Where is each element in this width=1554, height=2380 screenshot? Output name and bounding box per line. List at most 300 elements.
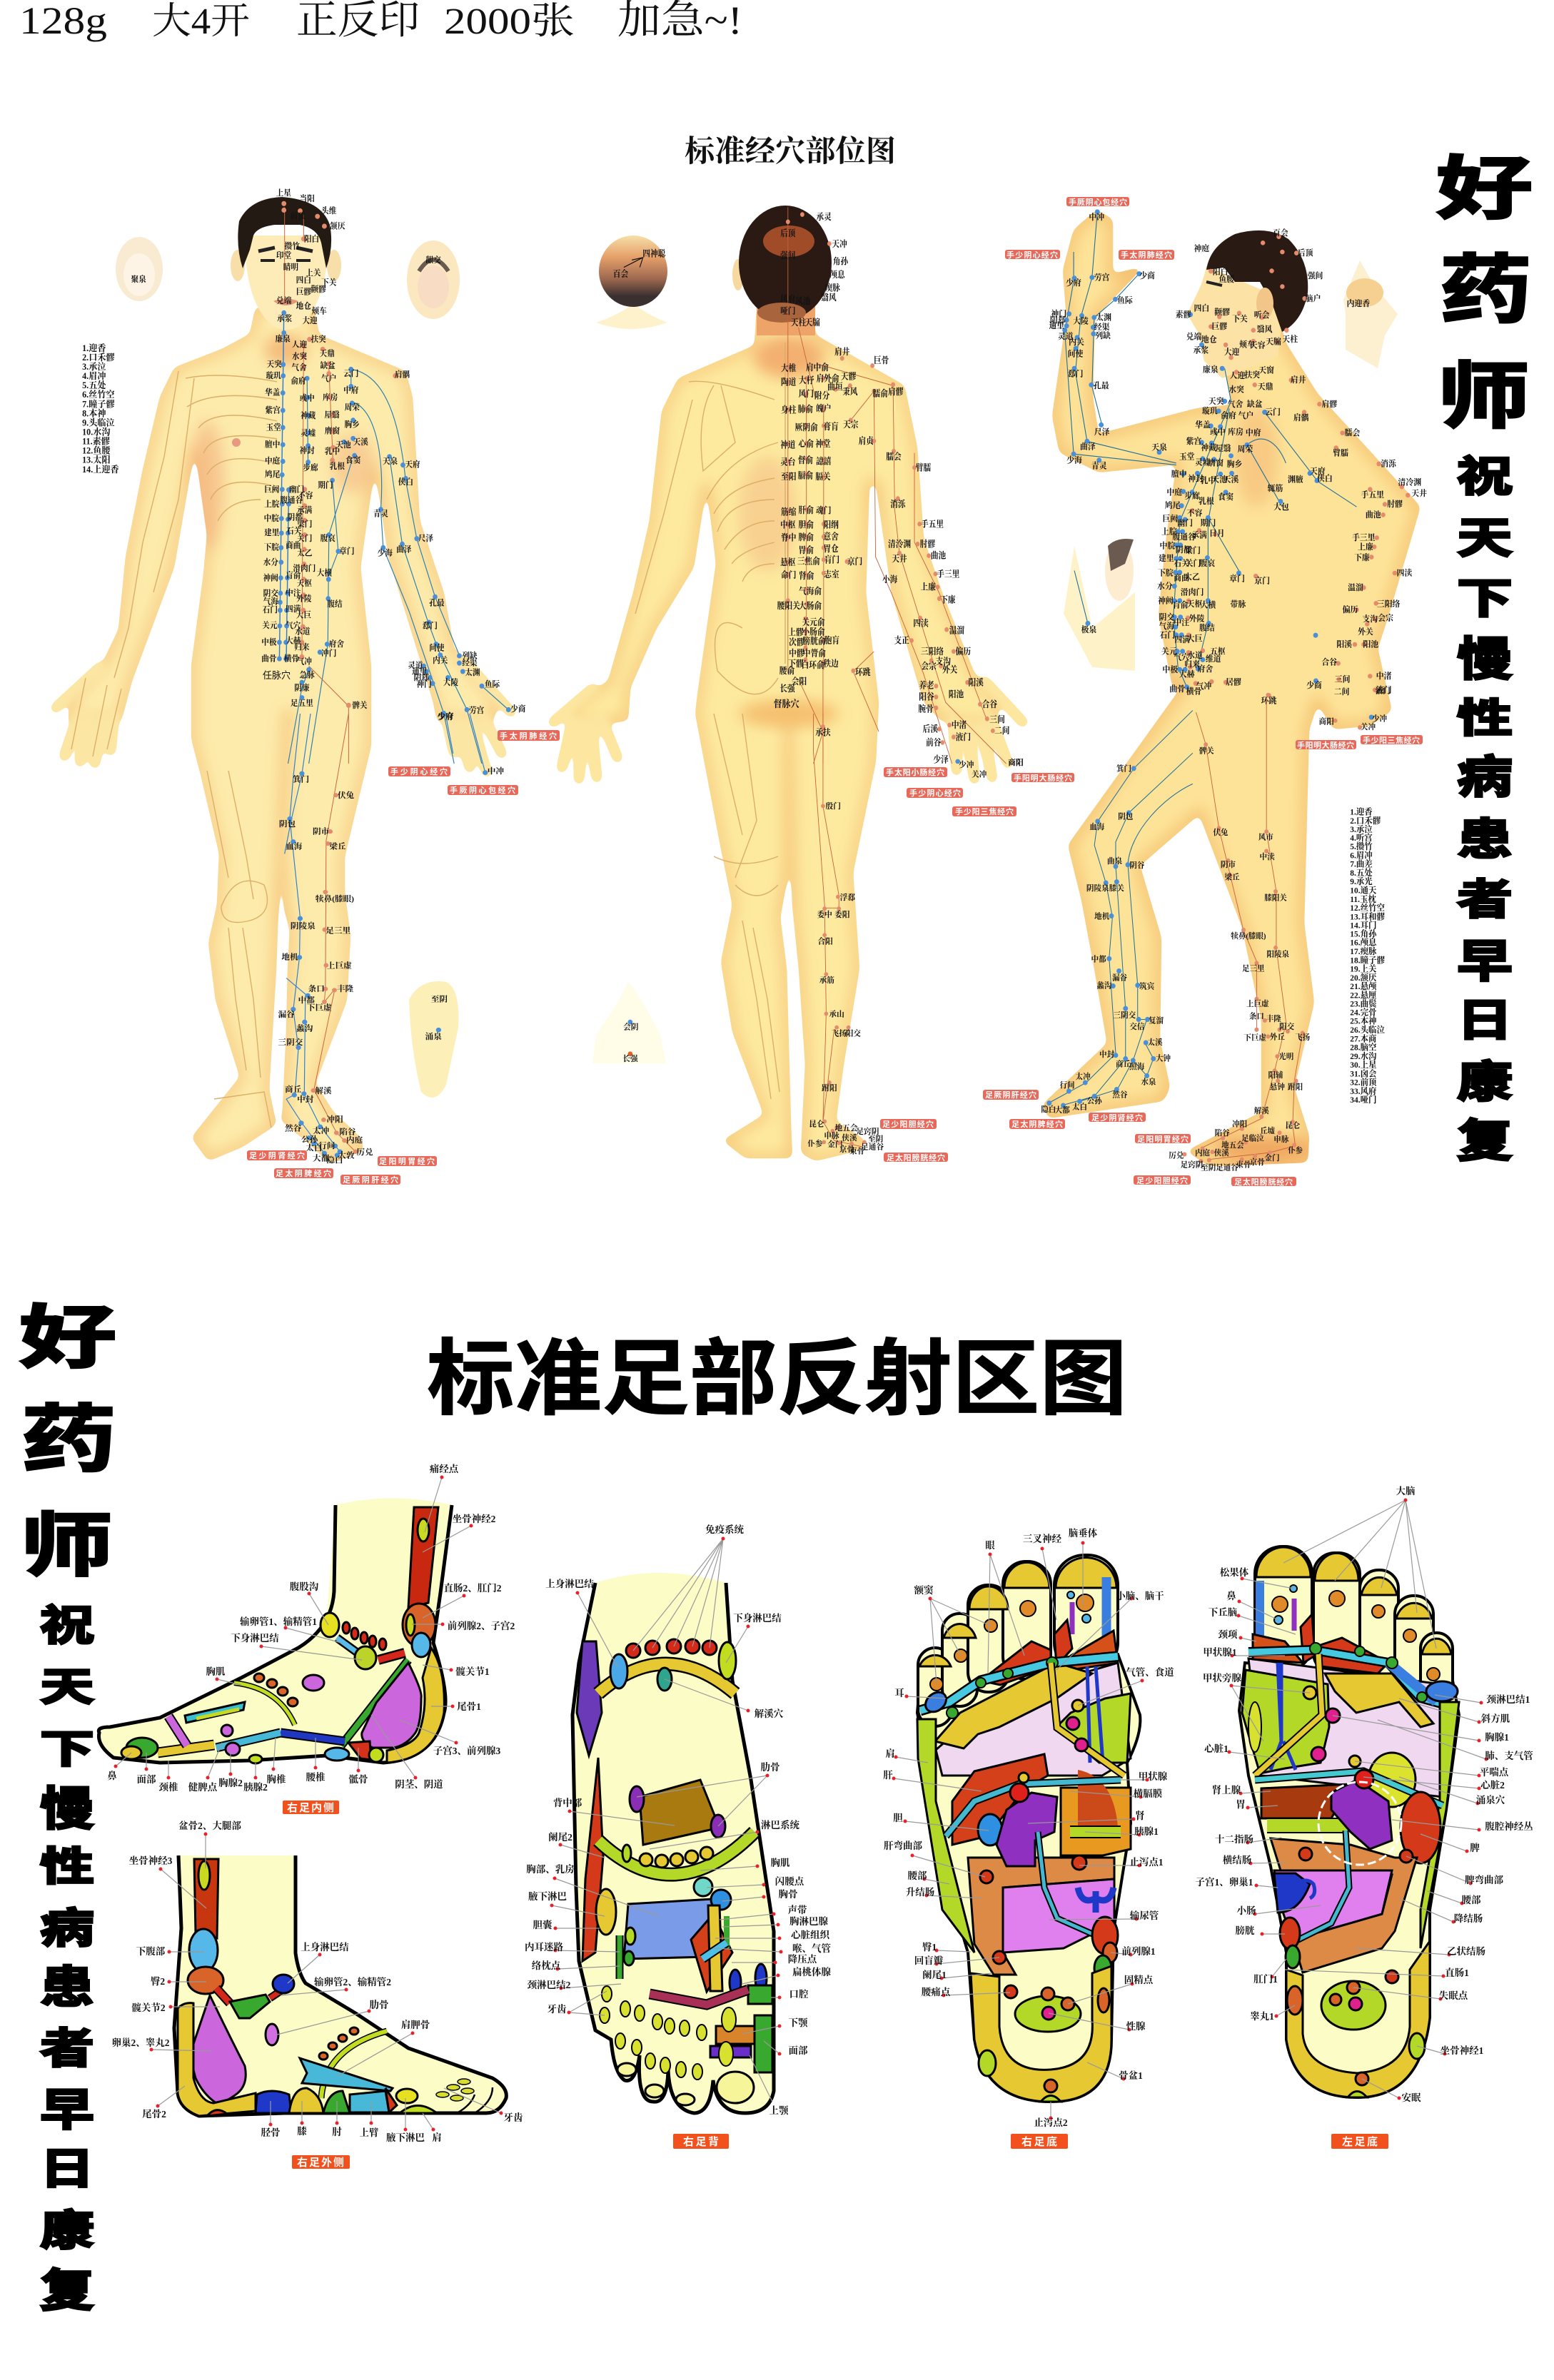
meridians and points back upper: 百会 xyxy=(613,268,629,279)
panel: right foot medial side xyxy=(99,1463,515,1814)
panel: right foot dorsal: 降压点 xyxy=(788,1953,818,1965)
meridians and points back upper: 阳纲 xyxy=(823,520,839,530)
meridians and points front upper: 承浆 xyxy=(277,313,292,323)
panel: right foot sole: 臀1 xyxy=(922,1941,937,1953)
panel: right foot sole: 阑尾1 xyxy=(922,1969,947,1980)
meridians and points back lower: 仆参 xyxy=(807,1139,823,1148)
meridians and points side upper: 周荣 xyxy=(1237,444,1253,454)
meridians and points side lower: 足临泣 xyxy=(1241,1133,1264,1143)
panel: right foot dorsal: 背中部 xyxy=(553,1797,582,1808)
meridians and points side lower: 外丘 xyxy=(1270,1032,1285,1041)
meridians and points side lower: 商阳 xyxy=(1319,716,1334,726)
meridians and points back upper: 四渎 xyxy=(913,618,929,629)
panel: right foot dorsal: 牙齿 xyxy=(547,2003,567,2015)
panel: left foot sole: 心脏1 xyxy=(1204,1743,1228,1754)
meridians and points front lower: 商丘 xyxy=(285,1084,301,1094)
meridian tags front: 足厥阴肝经穴 xyxy=(343,1175,398,1185)
meridians and points front lower: 足三里 xyxy=(326,926,350,935)
meridians and points front upper: 四白 xyxy=(296,275,311,285)
meridians and points back upper: 后溪 xyxy=(923,724,939,734)
meridians and points side upper: 内迎香 xyxy=(1347,298,1370,308)
meridians and points front lower: 公孙 xyxy=(301,1134,318,1144)
meridians and points back lower: 足通谷 xyxy=(861,1143,884,1152)
meridians and points front lower: 少府 xyxy=(437,712,454,721)
meridians and points side lower: 隐白 xyxy=(1041,1105,1056,1114)
panel: right foot dorsal: 声带 xyxy=(788,1904,807,1915)
ribs and bones back xyxy=(635,343,785,1099)
meridians and points side lower: 蠡沟 xyxy=(1096,981,1112,991)
meridians and points side lower: 19.上关 xyxy=(1350,963,1377,974)
panel: right foot dorsal: 阑尾2 xyxy=(548,1831,572,1843)
meridians and points front upper: 上星 xyxy=(276,188,291,198)
meridians and points back upper: 二间 xyxy=(994,725,1010,736)
meridians and points back upper: 膈关 xyxy=(815,471,831,482)
panel: left foot sole: 子宫1、卵巢1 xyxy=(1195,1876,1253,1888)
panel: left foot sole: 腰部 xyxy=(1462,1894,1481,1905)
meridians and points side upper: 彧中 xyxy=(1210,427,1226,437)
tag: right foot dorsal: 右足背 xyxy=(683,2135,719,2148)
meridians and points side upper: 郄门 xyxy=(1068,368,1083,379)
meridians and points side upper: 缺盆 xyxy=(1247,399,1263,409)
panel: left foot sole: 小肠 xyxy=(1236,1905,1256,1916)
panel: right foot lateral side: 胫骨 xyxy=(261,2127,281,2138)
meridians and points side upper: 列缺 xyxy=(1095,330,1111,340)
panel: right foot lateral side: 牙齿 xyxy=(504,2112,523,2123)
meridians and points side lower: 28.脑空 xyxy=(1350,1042,1377,1053)
meridians and points side upper: 扶突 xyxy=(1244,370,1260,380)
meridians and points back upper: 督俞 xyxy=(798,455,814,465)
meridians and points side upper: 肘髎 xyxy=(1387,499,1403,509)
panel: right foot sole: 性腺 xyxy=(1126,2020,1146,2032)
meridians and points front upper: 上脘 xyxy=(264,499,279,509)
meridians and points side lower: 照海 xyxy=(1129,1062,1145,1071)
panel: right foot sole: 三叉神经 xyxy=(1023,1533,1061,1544)
panel: right foot sole: 脑垂体 xyxy=(1069,1527,1098,1539)
meridians and points side upper: 四满 xyxy=(1174,634,1190,644)
meridians and points side lower: 太冲 xyxy=(1076,1072,1091,1081)
meridians and points side lower: 三阴交 xyxy=(1114,1011,1136,1020)
meridians and points front lower: 梁丘 xyxy=(329,841,345,851)
panel: left foot sole: 横结肠 xyxy=(1223,1854,1252,1865)
meridians and points side upper: 神藏 xyxy=(1201,442,1216,452)
meridians and points back upper: 长强 xyxy=(779,683,796,694)
meridians and points back upper: 胞肓 xyxy=(824,635,840,646)
meridians and points front upper: 天突 xyxy=(266,360,282,369)
panel: right foot dorsal: 颈淋巴结2 xyxy=(528,1979,571,1990)
panel: right foot medial side: 胸肌 xyxy=(206,1666,226,1677)
meridians and points side upper: 腹通谷 xyxy=(1172,532,1196,542)
meridians and points back lower: 阳交 xyxy=(846,1028,861,1038)
meridians and points front lower: 厉兑 xyxy=(357,1147,373,1157)
meridians and points side lower: 至阴足通谷 xyxy=(1201,1163,1238,1173)
meridians and points side upper: 劳宫 xyxy=(1094,272,1110,282)
meridians and points back upper: 强间 xyxy=(780,250,796,260)
meridians and points back upper: 陶道 xyxy=(781,377,797,388)
panel: right foot lateral side: 肘 xyxy=(332,2126,342,2137)
slogan: left column: 天 xyxy=(40,1665,94,1709)
meridians and points front upper: 紫宫 xyxy=(266,405,281,415)
panel: left foot sole: 甲状旁腺 xyxy=(1203,1672,1241,1683)
meridians and points side lower: 阴市 xyxy=(1221,860,1236,869)
meridians and points back lower: 浮郄 xyxy=(840,893,855,902)
meridians and points side upper: 神门 xyxy=(1051,308,1066,318)
meridians and points back upper: 肩贞 xyxy=(858,435,874,446)
figure: back body xyxy=(553,206,1074,1163)
meridians and points side upper: 颧髎 xyxy=(1214,307,1230,317)
meridians and points back upper: 小海 xyxy=(882,574,898,584)
meridians and points side lower: 交信 xyxy=(1129,1022,1145,1031)
meridians and points back upper: 臑会 xyxy=(886,451,902,462)
meridians and points back upper: 手三里 xyxy=(937,569,960,579)
panel: right foot medial side: 输卵管1、输精管1 xyxy=(240,1616,317,1627)
meridians and points side lower: 箕门 xyxy=(1116,764,1131,774)
panel: right foot sole: 小脑、脑干 xyxy=(1116,1591,1164,1601)
panel: left foot sole: 脾 xyxy=(1470,1842,1480,1853)
slogan: right column: 师 xyxy=(1438,356,1530,437)
meridians and points side upper: 幽门 xyxy=(1177,518,1193,528)
meridians and points front lower xyxy=(278,712,504,1165)
meridians and points front upper: 印堂 xyxy=(276,250,291,260)
meridians and points side upper: 手五里 xyxy=(1361,490,1384,500)
panel: right foot dorsal: 胆囊 xyxy=(533,1919,553,1930)
panel: right foot medial side: 健脾点 xyxy=(188,1781,218,1793)
meridians and points side lower: 27.本商 xyxy=(1350,1033,1377,1044)
meridians and points back upper: 巨骨 xyxy=(874,355,889,365)
meridians and points side upper: 气户 xyxy=(1238,410,1253,420)
meridians and points side upper: 脑户 xyxy=(1306,293,1321,303)
meridians and points side lower: 冲阳 xyxy=(1232,1119,1247,1128)
meridians and points side lower: 下巨虚 xyxy=(1243,1033,1266,1043)
meridians and points back upper: 下廉 xyxy=(940,594,956,605)
meridians and points back upper: 腕骨 xyxy=(918,704,934,714)
panel: right foot medial side: 面部 xyxy=(137,1773,156,1785)
panel: right foot dorsal: 胸部、乳房 xyxy=(526,1863,575,1875)
meridians and points side lower: 膝关 xyxy=(1109,883,1124,893)
meridians and points front upper: 攒竹 xyxy=(285,240,300,251)
panel: left foot sole: 鼻 xyxy=(1226,1590,1236,1601)
meridians and points back upper: 臑俞 xyxy=(873,388,888,399)
panel: left foot sole: 下丘脑 xyxy=(1209,1607,1238,1618)
meridians and points front upper: 2.口禾髎 xyxy=(82,352,115,363)
panel: right foot sole: 输尿管 xyxy=(1130,1910,1159,1921)
meridians and points side lower: 昆仑 xyxy=(1285,1120,1301,1130)
meridians and points front lower: 涌泉 xyxy=(425,1031,442,1041)
panel: right foot sole: 骨盆1 xyxy=(1119,2070,1143,2081)
meridians and points side lower: 少冲 xyxy=(1372,714,1387,723)
panel: left foot sole: 大脑 xyxy=(1396,1485,1416,1497)
meridians and points side lower: 17.瘈脉 xyxy=(1350,946,1377,956)
meridians and points side upper: 百会 xyxy=(1273,228,1288,238)
meridians and points side upper: 中冲 xyxy=(1089,212,1104,222)
meridians and points side upper: 外关 xyxy=(1358,627,1373,637)
meridians and points side upper: 四白 xyxy=(1194,303,1209,313)
meridians and points side upper: 居髎 xyxy=(1226,677,1241,687)
meridians and points front upper: 扶突 xyxy=(311,334,326,344)
meridians and points side upper: 阴郄 xyxy=(1050,315,1066,325)
meridians and points front upper: 神藏 xyxy=(301,410,316,420)
meridians and points front upper: 3.承泣 xyxy=(82,361,106,372)
panel: right foot dorsal: 内耳迷路 xyxy=(525,1941,563,1953)
meridians and points front upper: 大赫 xyxy=(286,635,301,646)
meridians and points side lower: 34.哑门 xyxy=(1350,1095,1377,1105)
meridians and points side upper: 曲骨 xyxy=(1169,684,1185,694)
callouts dorsal xyxy=(552,1539,781,2102)
meridians and points back upper: 胆俞 xyxy=(799,520,814,530)
meridians and points side lower: 13.耳和髎 xyxy=(1350,911,1385,921)
meridians and points side upper: 听会 xyxy=(1254,310,1270,320)
meridians and points side upper: 玉堂 xyxy=(1179,451,1195,461)
title: foot reflexology chart: 标准足部反射区图 xyxy=(427,1332,1127,1425)
meridians and points front upper: 石门 xyxy=(263,604,278,614)
meridian tags side: 足太阳膀胱经穴 xyxy=(1234,1177,1293,1187)
meridians and points side upper: 商曲 xyxy=(1174,572,1189,582)
slogan: right column: 好 xyxy=(1436,150,1533,228)
meridians and points back upper: 消泺 xyxy=(890,499,907,509)
meridians and points side upper: 渊腋 xyxy=(1288,474,1303,485)
meridians and points side upper: 中极 xyxy=(1162,664,1178,674)
small anatomy insets: tongue, mouth, sole, perineum, nose, raised arm xyxy=(116,237,1398,1098)
meridians and points side upper: 维道 xyxy=(1206,654,1221,664)
panel: right foot dorsal: 胸骨 xyxy=(778,1888,798,1900)
slogan: right column: 慢 xyxy=(1457,633,1513,685)
meridians and points front upper: 少府 xyxy=(438,712,453,721)
meridians and points front upper: 少海 xyxy=(378,547,393,558)
meridians and points front upper: 龈交 xyxy=(425,255,441,265)
meridians and points back upper: 支沟 xyxy=(936,657,951,667)
meridians and points side upper: 鸠尾 xyxy=(1165,500,1181,510)
meridians and points back upper: 督脉穴 xyxy=(774,698,799,709)
meridians and points side lower: 大都 xyxy=(1055,1105,1070,1115)
figure: side body xyxy=(983,197,1427,1187)
slogan: right column: 者 xyxy=(1457,876,1513,923)
meridians and points back upper: 肩髎 xyxy=(888,386,904,397)
meridians and points front lower: 血海 xyxy=(286,841,302,851)
meridians and points front lower: 陷谷 xyxy=(339,1127,356,1137)
meridians and points side upper: 步廊 xyxy=(1184,490,1200,501)
meridians and points front upper: 肓俞 xyxy=(286,570,301,580)
meridians and points front upper: 四满 xyxy=(286,604,301,614)
meridian tags side: 足少阳胆经穴 xyxy=(1136,1175,1188,1185)
meridians and points side upper: 大赫 xyxy=(1179,669,1195,679)
panel: right foot medial side: 痛经点 xyxy=(430,1463,460,1474)
meridians and points back upper: 中枢 xyxy=(780,520,796,530)
meridians and points side upper: 环跳 xyxy=(1261,696,1277,706)
meridians and points side upper: 腹结 xyxy=(1199,623,1215,633)
meridians and points front upper: 下关 xyxy=(321,277,336,288)
meridians and points side upper: 巨阙 xyxy=(1162,513,1178,524)
panel: right foot sole: 前列腺1 xyxy=(1121,1945,1156,1957)
meridians and points back upper: 脾俞 xyxy=(799,532,814,542)
panel: right foot sole: 胆 xyxy=(893,1813,903,1823)
slogan: right column: 患 xyxy=(1457,815,1513,864)
meridians and points side upper: 少商 xyxy=(1306,680,1322,690)
meridians and points side upper: 鱼腰 xyxy=(1219,274,1235,284)
panel: right foot medial side: 坐骨神经2 xyxy=(453,1513,496,1524)
meridians and points front upper: 10.水沟 xyxy=(82,426,111,437)
panel: right foot dorsal: 扁桃体腺 xyxy=(792,1966,831,1978)
meridians and points side upper: 消泺 xyxy=(1381,458,1397,469)
meridians and points side upper: 期门 xyxy=(1200,518,1216,528)
meridian tags front: 足阳明胃经穴 xyxy=(379,1156,435,1166)
meridians and points front lower: 中都 xyxy=(298,995,315,1005)
meridians and points side lower: 1.迎香 xyxy=(1350,806,1373,816)
meridians and points side upper: 璇玑 xyxy=(1202,405,1218,416)
meridians and points front upper: 天池 xyxy=(335,440,351,450)
meridians and points back upper: 环跳 xyxy=(855,667,871,677)
meridians and points front upper: 缺盆 xyxy=(321,360,335,370)
meridians and points side lower: 25.本神 xyxy=(1350,1016,1377,1026)
meridians and points back upper: 灵台 xyxy=(780,457,796,467)
meridians and points back lower: 会阴 xyxy=(623,1022,639,1031)
meridians and points front lower: 阴陵泉 xyxy=(291,921,316,931)
meridians and points front upper: 不容 xyxy=(298,490,313,500)
slogan: right column: 药 xyxy=(1440,249,1532,333)
meridian tags back: 手少阳三焦经穴 xyxy=(955,806,1014,816)
panel: right foot sole: 肝 xyxy=(883,1769,893,1781)
panel: left foot sole: 腹腔神经丛 xyxy=(1485,1821,1533,1832)
meridians and points back upper: 京门 xyxy=(847,556,862,567)
slogan: right column: 康 xyxy=(1457,1058,1513,1106)
meridians and points back upper: 下髎 xyxy=(788,658,804,669)
meridians and points front upper: 列缺 xyxy=(462,650,478,661)
meridians and points back upper: 中髎 xyxy=(789,648,804,659)
meridians and points side upper: 太乙 xyxy=(1184,572,1200,582)
meridians and points front upper: 廉泉 xyxy=(276,333,291,344)
tag: right sole: 右足底 xyxy=(1021,2135,1057,2148)
meridians and points back upper: 膏肓 xyxy=(823,421,839,432)
meridians and points side upper: 大迎 xyxy=(1224,347,1239,357)
meridians and points side lower: 上巨虚 xyxy=(1246,999,1269,1008)
panel: right foot dorsal: 面部 xyxy=(788,2045,808,2056)
slogan: left column: 康 xyxy=(40,2207,94,2254)
meridian tags back: 足少阳胆经穴 xyxy=(882,1119,934,1129)
meridians and points side upper: 章门 xyxy=(1229,573,1245,583)
meridians and points side upper: 阳池 xyxy=(1363,639,1378,649)
meridians and points side upper: 上廉 xyxy=(1358,542,1373,552)
meridians and points side lower: 32.前顶 xyxy=(1350,1077,1378,1087)
meridians and points back upper: 意舍 xyxy=(823,532,839,542)
meridians and points front upper: 兑端 xyxy=(276,295,291,305)
meridians and points side lower: 漏谷 xyxy=(1112,973,1127,983)
panel: right foot medial side: 下身淋巴结 xyxy=(231,1632,279,1644)
panel: right foot medial side: 鼻 xyxy=(107,1770,117,1781)
tag: right sole xyxy=(1011,2134,1068,2149)
meridians and points front upper: 14.上迎香 xyxy=(82,464,119,475)
meridians and points back upper: 曲垣 xyxy=(827,381,843,392)
slogan: left column: 日 xyxy=(40,2145,94,2193)
meridians and points front lower: 下巨虚 xyxy=(307,1003,332,1012)
meridians and points back upper: 肩中俞 xyxy=(806,362,829,373)
panel: left foot sole: 肾上腺 xyxy=(1212,1784,1241,1796)
meridians and points front upper: 水道 xyxy=(295,626,311,636)
meridians and points front lower: 隐白 xyxy=(326,1155,343,1165)
meridians and points front lower: 犊鼻(膝眼) xyxy=(316,893,354,903)
meridians and points front upper: 少商 xyxy=(510,704,526,714)
meridians and points front upper: 承满 xyxy=(297,505,313,515)
meridians and points side lower: 14.耳门 xyxy=(1350,920,1377,930)
panel: right foot dorsal: 络枕点 xyxy=(532,1960,562,1971)
meridians and points side upper: 神封 xyxy=(1188,473,1204,484)
meridians and points side upper: 臂臑 xyxy=(1333,447,1348,457)
meridians and points back upper: 次髎 xyxy=(789,637,804,647)
meridians and points side lower: 京骨 xyxy=(1250,1158,1265,1167)
meridians and points front upper: 大陵 xyxy=(443,677,458,687)
meridians and points side upper: 强间 xyxy=(1308,270,1323,280)
meridians and points back upper: 天牖 xyxy=(804,318,820,328)
meridians and points back lower: 足窍阴 xyxy=(856,1127,879,1136)
panel: right foot medial side: 前列腺2、子宫2 xyxy=(448,1620,515,1631)
meridians and points side lower: 11.玉枕 xyxy=(1350,894,1376,904)
meridians and points front upper: 巨髎 xyxy=(296,286,311,296)
panel: right foot medial side: 腹股沟 xyxy=(290,1581,319,1592)
meridians and points side upper: 天井 xyxy=(1411,488,1427,498)
slogan: left column: 药 xyxy=(21,1399,116,1481)
meridians and points front upper: 太乙 xyxy=(297,547,313,558)
panel: left foot sole: 失眠点 xyxy=(1439,1990,1469,2001)
meridians and points back lower: 委阳 xyxy=(834,910,850,919)
meridians and points back upper: 至阳 xyxy=(781,471,797,482)
meridians and points front upper: 髀关 xyxy=(352,700,368,710)
meridians and points back upper: 魄户 xyxy=(816,403,832,414)
meridians and points side lower: 血海 xyxy=(1089,822,1105,831)
meridian tags front xyxy=(247,730,560,1185)
panel: right foot medial side: 骶骨 xyxy=(348,1774,368,1785)
panel: right foot lateral side: 髋关节2 xyxy=(131,2002,166,2013)
meridians and points back upper: 附分 xyxy=(814,390,830,400)
panel: right foot lateral side: 上臂 xyxy=(360,2127,379,2138)
dashed solar plexus ring xyxy=(1318,1782,1401,1865)
meridians and points back upper: 阳溪 xyxy=(968,677,984,687)
meridians and points back upper: 风池 xyxy=(795,295,811,306)
meridians and points front upper: 中注 xyxy=(286,587,301,597)
meridians and points side lower: 2.口禾髎 xyxy=(1350,816,1381,826)
panel: right foot sole: 眼 xyxy=(985,1540,995,1551)
slogan: right column: 祝 xyxy=(1457,453,1513,500)
meridians and points back upper: 会阳 xyxy=(792,676,807,687)
meridians and points front upper: 归来 xyxy=(294,642,310,652)
panel: right foot sole: 固精点 xyxy=(1124,1974,1154,1985)
meridians and points front upper: 商曲 xyxy=(286,540,301,550)
meridians and points front upper: 颊车 xyxy=(311,305,327,315)
meridians and points back lower xyxy=(622,714,1024,1155)
meridian tags side: 手少阳三焦经穴 xyxy=(1363,735,1420,745)
meridians and points back upper: 哑门 xyxy=(780,305,796,316)
panel: left foot sole: 平喘点 xyxy=(1480,1766,1510,1778)
meridians and points front upper: 府舍 xyxy=(329,639,344,649)
meridians and points side lower: 24.完骨 xyxy=(1350,1008,1377,1018)
meridians and points side lower: 地五会 xyxy=(1221,1140,1244,1150)
meridians and points side lower: 18.瞳子髎 xyxy=(1350,956,1385,966)
panel: left foot sole: 松果体 xyxy=(1220,1566,1249,1579)
meridians and points front upper: 气穴 xyxy=(286,620,301,630)
meridians and points back upper: 中膂俞 xyxy=(803,648,826,659)
meridians and points side lower: 8.五处 xyxy=(1350,868,1373,878)
meridians and points side upper: 外陵 xyxy=(1189,613,1204,623)
meridian tags side: 足少阴肾经穴 xyxy=(1091,1113,1143,1123)
meridians and points back lower: 少冲 xyxy=(959,760,974,769)
meridians and points back upper: 承扶 xyxy=(815,727,831,738)
meridians and points side lower: 中渎 xyxy=(1260,852,1276,861)
meridians and points side upper: 尺泽 xyxy=(1094,427,1110,437)
meridians and points side upper: 云门 xyxy=(1265,407,1281,417)
meridians and points back upper: 肾俞 xyxy=(799,570,814,581)
meridians and points side lower: 关冲 xyxy=(1361,722,1376,731)
meridians and points back lower: 束骨 xyxy=(849,1146,865,1155)
meridians and points side upper: 偏历 xyxy=(1343,604,1358,614)
meridians and points side lower: 阳辅 xyxy=(1268,1070,1283,1080)
meridians and points front upper: 阴郄 xyxy=(413,672,429,682)
panel: right foot dorsal: 闪腰点 xyxy=(775,1875,805,1887)
